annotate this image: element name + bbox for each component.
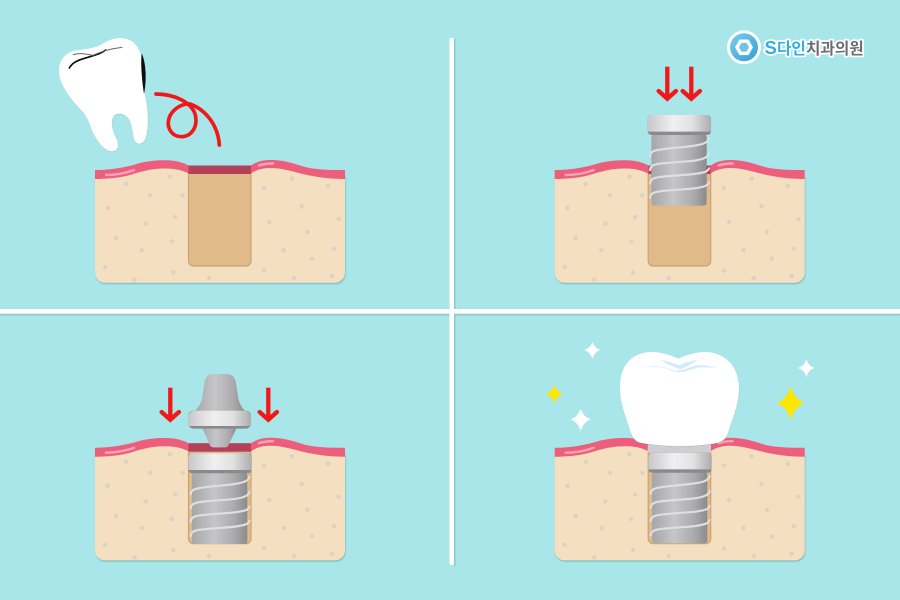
crown tooth	[620, 352, 739, 446]
logo text: 다인	[777, 40, 806, 58]
logo text: S	[764, 37, 777, 58]
icon: white sparkle right	[798, 359, 815, 377]
logo text: 치과의원	[806, 40, 864, 58]
panel: finished crown	[546, 342, 815, 560]
icon: white sparkle lower	[570, 408, 591, 431]
implant fixture	[648, 115, 711, 206]
abutment band	[648, 441, 711, 452]
panel: implant fixture inserted	[555, 67, 805, 283]
icon: large yellow sparkle	[777, 386, 805, 420]
arrow: left down arrow	[659, 67, 676, 99]
logo	[727, 30, 864, 64]
panel: abutment placement	[95, 374, 345, 560]
gum and bone with socket	[555, 438, 805, 560]
abutment	[188, 374, 251, 447]
sparkles	[546, 342, 815, 431]
panel: extracted tooth and empty socket	[59, 38, 345, 283]
icon: small yellow sparkle	[546, 385, 563, 403]
arrow: curled red removal arrow	[156, 94, 219, 145]
icon: white sparkle	[584, 342, 600, 359]
arrow: right down arrow	[683, 67, 700, 99]
icon: logo emblem	[727, 30, 761, 64]
implant fixture in bone	[648, 453, 712, 543]
gum and bone with empty socket	[95, 160, 345, 283]
arrow: right down arrow	[260, 388, 277, 420]
icon: damaged molar tooth	[59, 38, 148, 151]
implant fixture in bone	[188, 453, 252, 544]
gum and bone with socket	[95, 438, 345, 560]
gum and bone with socket	[555, 160, 805, 283]
arrow: left down arrow	[162, 388, 179, 420]
